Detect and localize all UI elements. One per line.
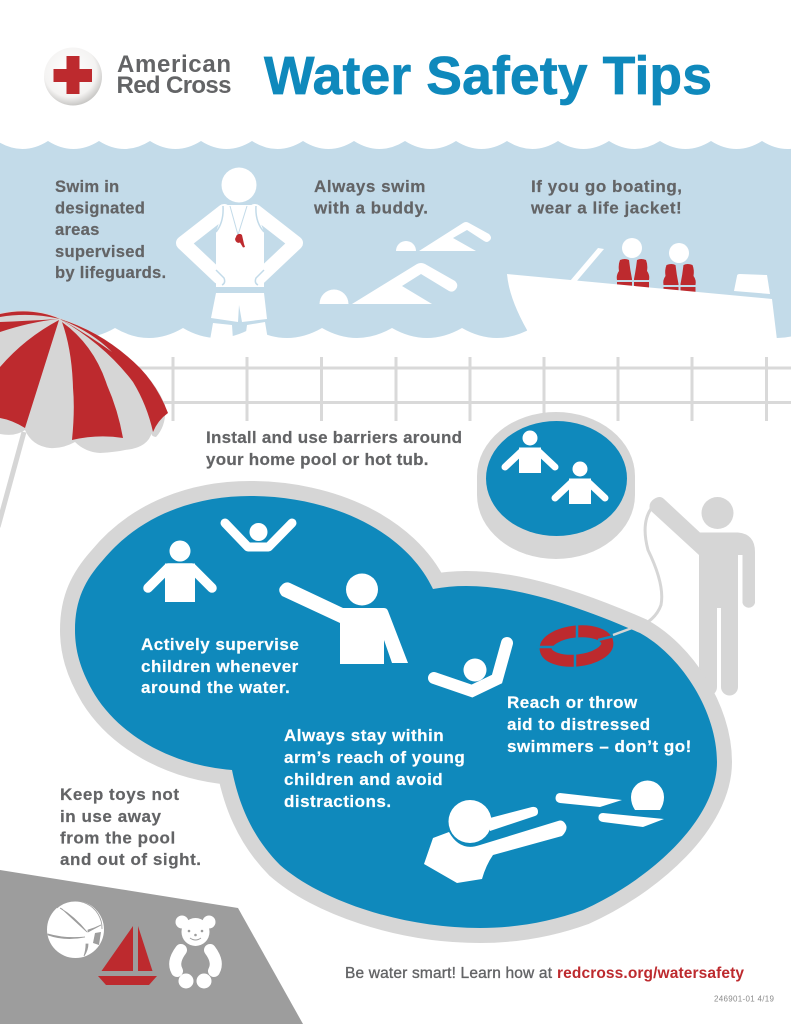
title: Water Safety Tips [264,47,712,106]
umbrella stripes [60,319,168,432]
text: supervise: around the water. [141,678,290,697]
icon: life jacket right [663,264,696,297]
icon: near swimmer [320,263,457,304]
text: reach or throw: swimmers – don’t go! [507,737,692,756]
tip: designated areas: areas [55,220,100,239]
icon: child reaching [556,780,664,827]
icon: beach umbrella [0,310,168,527]
text: arm's reach: children and avoid [284,770,443,789]
panel: open water band [0,141,791,338]
logo: American Red Cross [44,48,232,106]
icon: distressed child [434,643,507,691]
logo: American Red Cross: Red Cross [116,72,232,99]
icon: hot tub [477,412,635,559]
tip: barriers: your home pool or hot tub. [206,450,429,469]
tip: swim with a buddy: with a buddy. [313,198,428,218]
icon: boat with passengers [507,238,777,340]
icon: lifeguard [183,168,296,340]
tip: designated areas: designated [55,198,145,218]
icon: second child in tub [555,462,605,504]
fence [130,357,791,421]
tip: life jacket: If you go boating, [531,177,683,196]
text: arm's reach: arm’s reach of young [284,748,465,767]
tip: life jacket: wear a life jacket! [530,198,682,218]
icon: whistle [235,234,245,248]
text: arm's reach: Always stay within [284,726,444,745]
tip: keep toys away: from the pool [60,828,176,848]
print code: 246901-01 4/19 [714,994,775,1004]
tip: designated areas: by lifeguards. [55,263,166,282]
tip: designated areas: Swim in [55,177,119,196]
icon: teddy bear [175,916,216,988]
text: supervise: children whenever [141,657,299,676]
logo: American Red Cross: American [117,51,231,78]
text: reach or throw: Reach or throw [507,693,638,712]
icon: toy sailboat [98,926,157,985]
tip: keep toys away: and out of sight. [60,850,202,869]
icon: child arms raised [225,523,292,547]
tip: swim with a buddy: Always swim [314,177,426,196]
icon: adult reaching [424,800,566,883]
footer call to action: Be water smart! Learn how at [345,965,553,982]
icon: beach ball [47,901,104,958]
text: arm's reach: distractions. [284,792,392,811]
text: reach or throw: aid to distressed [507,715,651,734]
tip: keep toys away: Keep toys not [60,785,180,804]
icon: life jacket left [617,259,649,292]
icon: child standing [148,540,212,602]
icon: rescuer with rope [632,497,755,696]
icon: child in tub [505,430,555,473]
panel: pool deck [0,870,303,1024]
footer call to action [345,965,744,982]
icon: far swimmer [396,222,491,251]
tip: keep toys away: in use away [60,807,161,826]
icon: adult pointing [279,574,408,664]
panel: swimming pool [75,496,717,928]
footer call to action: redcross.org/watersafety [557,965,744,982]
icon: life ring [536,624,632,668]
tip: barriers: Install and use barriers around [206,428,462,447]
text: supervise: Actively supervise [141,635,299,654]
tip: designated areas: supervised [55,242,145,261]
